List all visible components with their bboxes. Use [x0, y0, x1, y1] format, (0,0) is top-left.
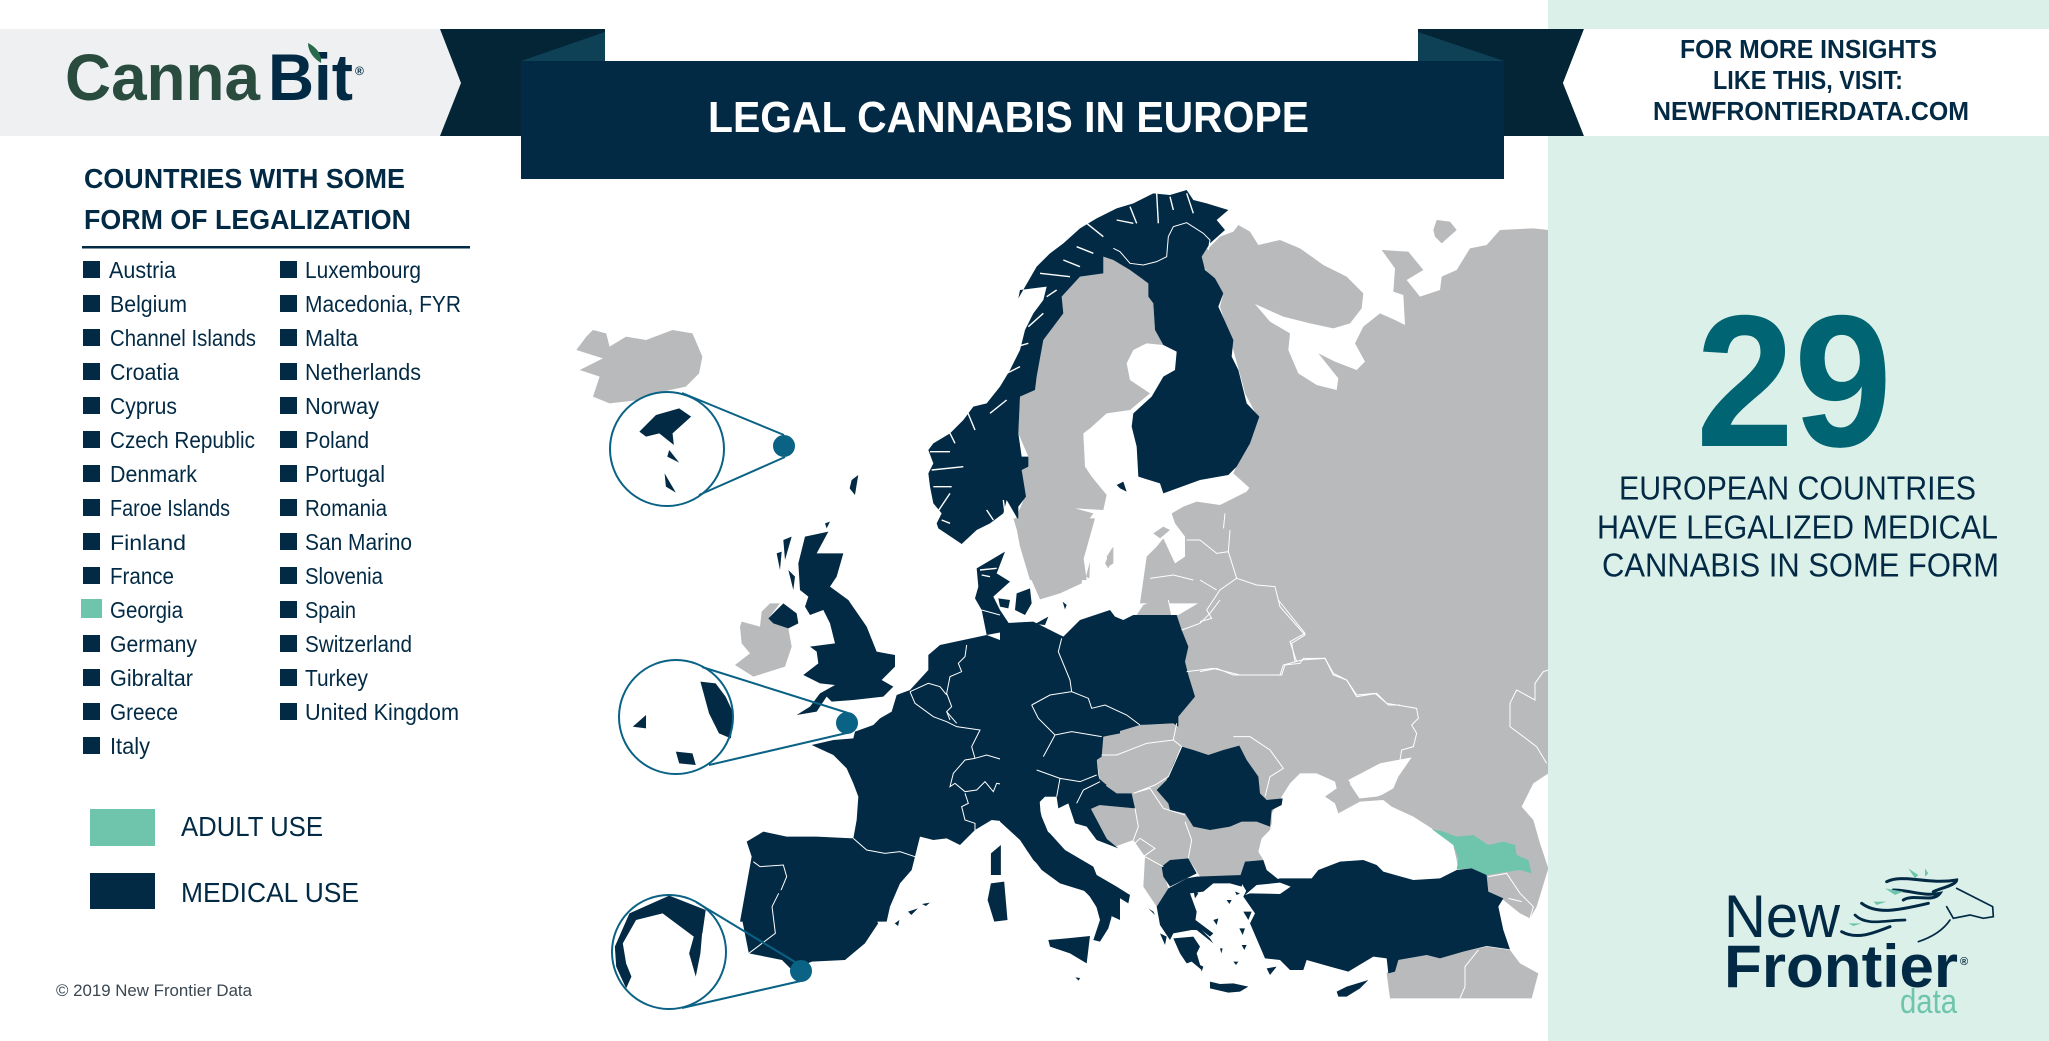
France, Benelux, Germany, Italy north and Spain north [740, 623, 1120, 922]
statistic caption: HAVE LEGALIZED MEDICAL [1597, 508, 1998, 546]
legend: adult use: ADULT USE [181, 811, 323, 842]
item: Belgium: Belgium [110, 291, 187, 317]
item: Austria [83, 257, 176, 283]
Georgia [1432, 829, 1532, 875]
Peloponnese [1173, 937, 1202, 970]
item: Italy: Italy [110, 733, 150, 759]
item: Germany: Germany [110, 631, 197, 657]
copyright: © 2019 New Frontier Data [56, 981, 253, 1000]
legend: adult use [90, 809, 323, 846]
Sardinia [988, 882, 1008, 922]
Channel Islands and Gibraltar insets [613, 660, 734, 1009]
Ireland [735, 603, 792, 677]
item: Norway: Norway [305, 393, 379, 419]
statistic caption: EUROPEAN COUNTRIES [1619, 470, 1976, 506]
legend: medical use: MEDICAL USE [181, 877, 359, 908]
item: Greece [83, 699, 178, 725]
Great Britain [797, 532, 895, 715]
call to action box: FOR MORE INSIGHTS [1680, 34, 1937, 64]
title ribbon: LEGAL CANNABIS IN EUROPE [708, 93, 1309, 142]
Malta [1075, 977, 1080, 981]
item: Malta: Malta [305, 325, 358, 351]
icon: horse [1842, 868, 1993, 942]
Turkey in Asia [1243, 860, 1510, 973]
heading: countries list: COUNTRIES WITH SOME [84, 163, 405, 194]
Scandinavia [928, 190, 1300, 603]
Danish islands [998, 588, 1067, 625]
central Europe and the Balkans [1000, 600, 1400, 981]
grey land: Russia and the north-east [1200, 220, 1548, 533]
Channel Islands inset [619, 660, 734, 773]
western Europe [735, 518, 1120, 922]
item: Austria: Austria [109, 257, 176, 283]
item: Turkey [280, 665, 368, 691]
Baltic islands [1105, 527, 1170, 568]
item: Croatia [83, 359, 179, 385]
New Frontier Data logo: data [1900, 983, 1957, 1021]
CannaBit logo band [0, 29, 470, 136]
Balearic islands [895, 903, 930, 926]
CannaBit logo band: Bit [268, 40, 353, 114]
New Frontier Data logo: ® [1960, 956, 1968, 968]
Baltic states [1140, 413, 1300, 603]
item: Czech Republic: Czech Republic [110, 427, 255, 453]
Northern Ireland [768, 603, 798, 628]
item: Spain: Spain [305, 597, 356, 623]
title ribbon [440, 29, 1584, 179]
item: France [83, 563, 174, 589]
panel: right mint sidebar [1548, 0, 2049, 1041]
callout: Faroe Islands [610, 392, 794, 506]
CannaBit logo band: ® [355, 64, 364, 78]
Norway fjords [930, 193, 1193, 523]
southern Iberia [742, 880, 885, 970]
item: Belgium [83, 291, 187, 317]
statistic caption: CANNABIS IN SOME FORM [1602, 546, 1999, 584]
Germany, Poland, Czech Republic, Austria, Slovenia, Croatia [1000, 610, 1195, 845]
statistic caption [1597, 470, 1999, 584]
Turkey, Georgia and the south-east [1200, 530, 1548, 998]
Greece mainland [1157, 870, 1245, 943]
Iceland, Shetland and Faroe inset [576, 330, 858, 506]
item: Slovenia [280, 563, 383, 589]
Denmark [975, 552, 1013, 635]
item: Croatia: Croatia [110, 359, 179, 385]
item: Georgia [81, 597, 183, 623]
Turkey in Europe [1240, 860, 1278, 892]
item: Portugal: Portugal [305, 461, 385, 487]
Sweden [1015, 257, 1163, 580]
New Frontier Data logo [1724, 868, 1993, 1021]
CannaBit logo band: Canna [65, 40, 261, 114]
country list: second column [280, 257, 461, 725]
item: Italy [83, 733, 150, 759]
item: Greece: Greece [110, 699, 178, 725]
Baltic borders [1150, 513, 1237, 580]
Hebrides and Orkney [777, 522, 830, 590]
Macedonia [1162, 858, 1197, 887]
item: Gibraltar: Gibraltar [110, 665, 193, 691]
New Frontier Data logo: Frontier [1724, 933, 1958, 1000]
call to action box: NEWFRONTIERDATA.COM [1653, 96, 1969, 126]
item: Finland: Finland [110, 532, 186, 555]
western borders [753, 610, 1100, 920]
Faroe inset [611, 393, 724, 506]
Jutland inlets [980, 568, 997, 577]
item: Faroe Islands: Faroe Islands [110, 495, 230, 521]
Sicily [1048, 936, 1090, 963]
New Frontier Data logo: New [1724, 883, 1841, 950]
Iceland [576, 330, 702, 403]
item: Slovenia: Slovenia [305, 563, 383, 589]
Sea of Marmara [1245, 883, 1291, 895]
Norway and Finland border [1113, 223, 1210, 265]
heading: countries list [82, 163, 470, 248]
item: United Kingdom: United Kingdom [305, 699, 459, 725]
Shetland [850, 475, 858, 495]
Cyprus [1337, 980, 1368, 997]
Southern Sweden [1013, 518, 1095, 599]
Sea of Azov [1348, 757, 1412, 798]
central and eastern borders [1032, 600, 1400, 875]
item: Macedonia, FYR: Macedonia, FYR [305, 291, 461, 317]
map of Europe [576, 190, 1548, 1009]
item: Poland: Poland [305, 427, 369, 453]
item: France: France [110, 563, 174, 589]
item: Denmark: Denmark [110, 461, 197, 487]
legend: medical use [90, 873, 359, 909]
call to action box: LIKE THIS, VISIT: [1713, 65, 1903, 95]
item: Romania: Romania [305, 495, 387, 521]
item: Cyprus: Cyprus [110, 393, 177, 419]
southern Italy [1000, 797, 1130, 942]
item: Finland [83, 532, 186, 555]
Romania [1157, 746, 1283, 830]
item: San Marino: San Marino [305, 529, 412, 555]
southern Spain, Corsica, Sardinia and Balearics [742, 845, 1008, 970]
legend [90, 809, 359, 909]
call to action box [1563, 29, 2049, 136]
Corsica [991, 845, 1001, 875]
item: Georgia: Georgia [110, 597, 183, 623]
item: Malta [280, 325, 358, 351]
Syria and Iraq [1387, 947, 1538, 998]
item: Poland [280, 427, 369, 453]
eastern borders [1200, 530, 1548, 998]
callout: Gibraltar [612, 895, 811, 1009]
Aland islands [1117, 482, 1127, 492]
Gibraltar inset [613, 896, 726, 1009]
item: Cyprus [83, 393, 177, 419]
item: Turkey: Turkey [305, 665, 368, 691]
item: Spain [280, 597, 356, 623]
Norway and Finland [928, 190, 1259, 544]
item: Switzerland: Switzerland [305, 631, 412, 657]
callout: Channel Islands [619, 660, 857, 774]
big number: 29 [1696, 276, 1892, 486]
grey land: Ukraine, Caucasus and Bulgaria [1200, 528, 1548, 998]
country list: first column [81, 257, 256, 759]
grey land: Balkans and central east [1087, 598, 1207, 907]
heading: countries list: FORM OF LEGALIZATION [84, 204, 411, 235]
Greek islands [1148, 890, 1277, 975]
item: Channel Islands: Channel Islands [110, 325, 256, 351]
Crete [1210, 982, 1248, 993]
item: Netherlands: Netherlands [305, 359, 421, 385]
item: Luxembourg: Luxembourg [305, 257, 421, 283]
